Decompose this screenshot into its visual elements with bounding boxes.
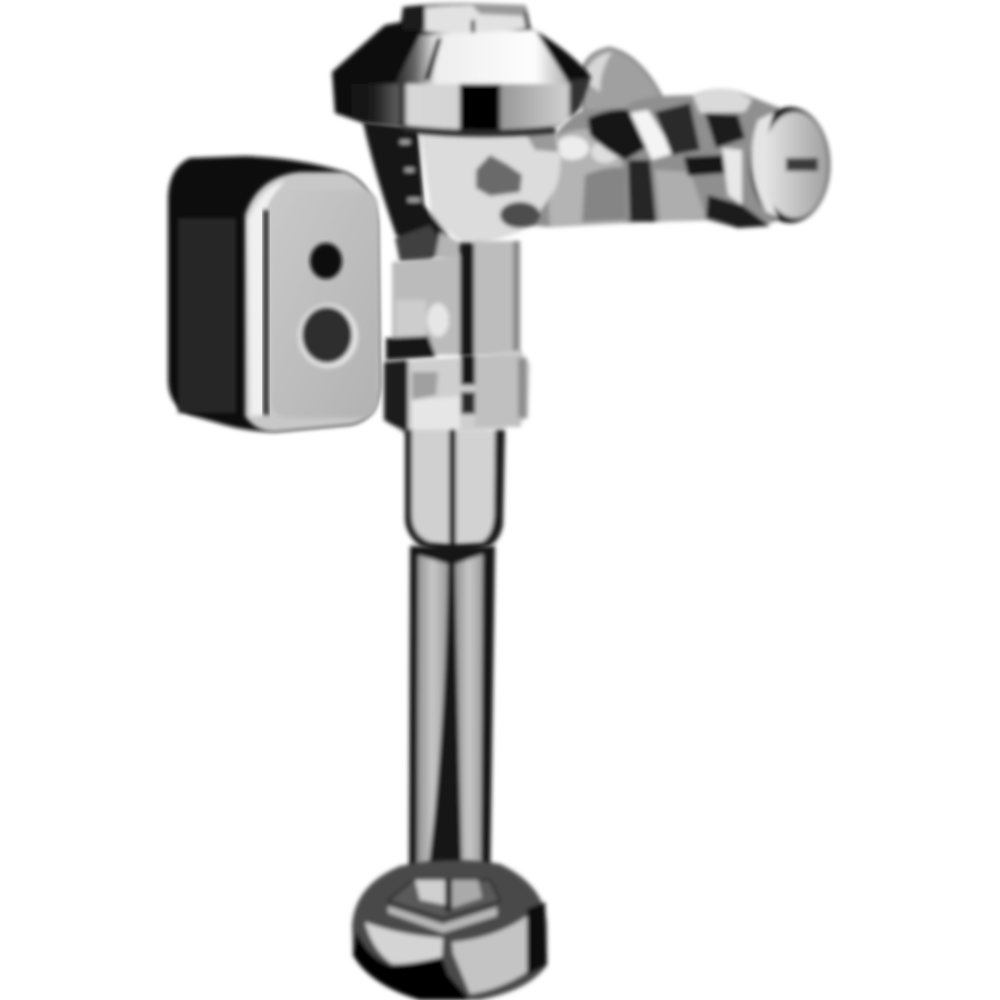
sensor face <box>271 190 378 418</box>
sensor housing <box>168 156 380 432</box>
housing shell <box>168 156 380 432</box>
rear stop cap <box>578 48 662 115</box>
indicator hole <box>310 243 342 279</box>
neck and side connection <box>386 241 520 360</box>
coupling nut <box>384 350 530 434</box>
lower tube section <box>409 546 495 885</box>
upper tube section <box>405 430 505 556</box>
sensor eye <box>298 304 358 368</box>
hex collar <box>388 880 500 918</box>
floor flange base <box>352 860 547 1000</box>
valve handle assembly <box>530 48 830 228</box>
push button <box>750 107 830 223</box>
valve body bowl <box>363 122 561 262</box>
handle body <box>530 89 790 228</box>
chrome front rim <box>245 172 380 432</box>
button logo <box>786 158 818 171</box>
dark side panel <box>178 218 236 413</box>
dome cover <box>332 3 591 137</box>
